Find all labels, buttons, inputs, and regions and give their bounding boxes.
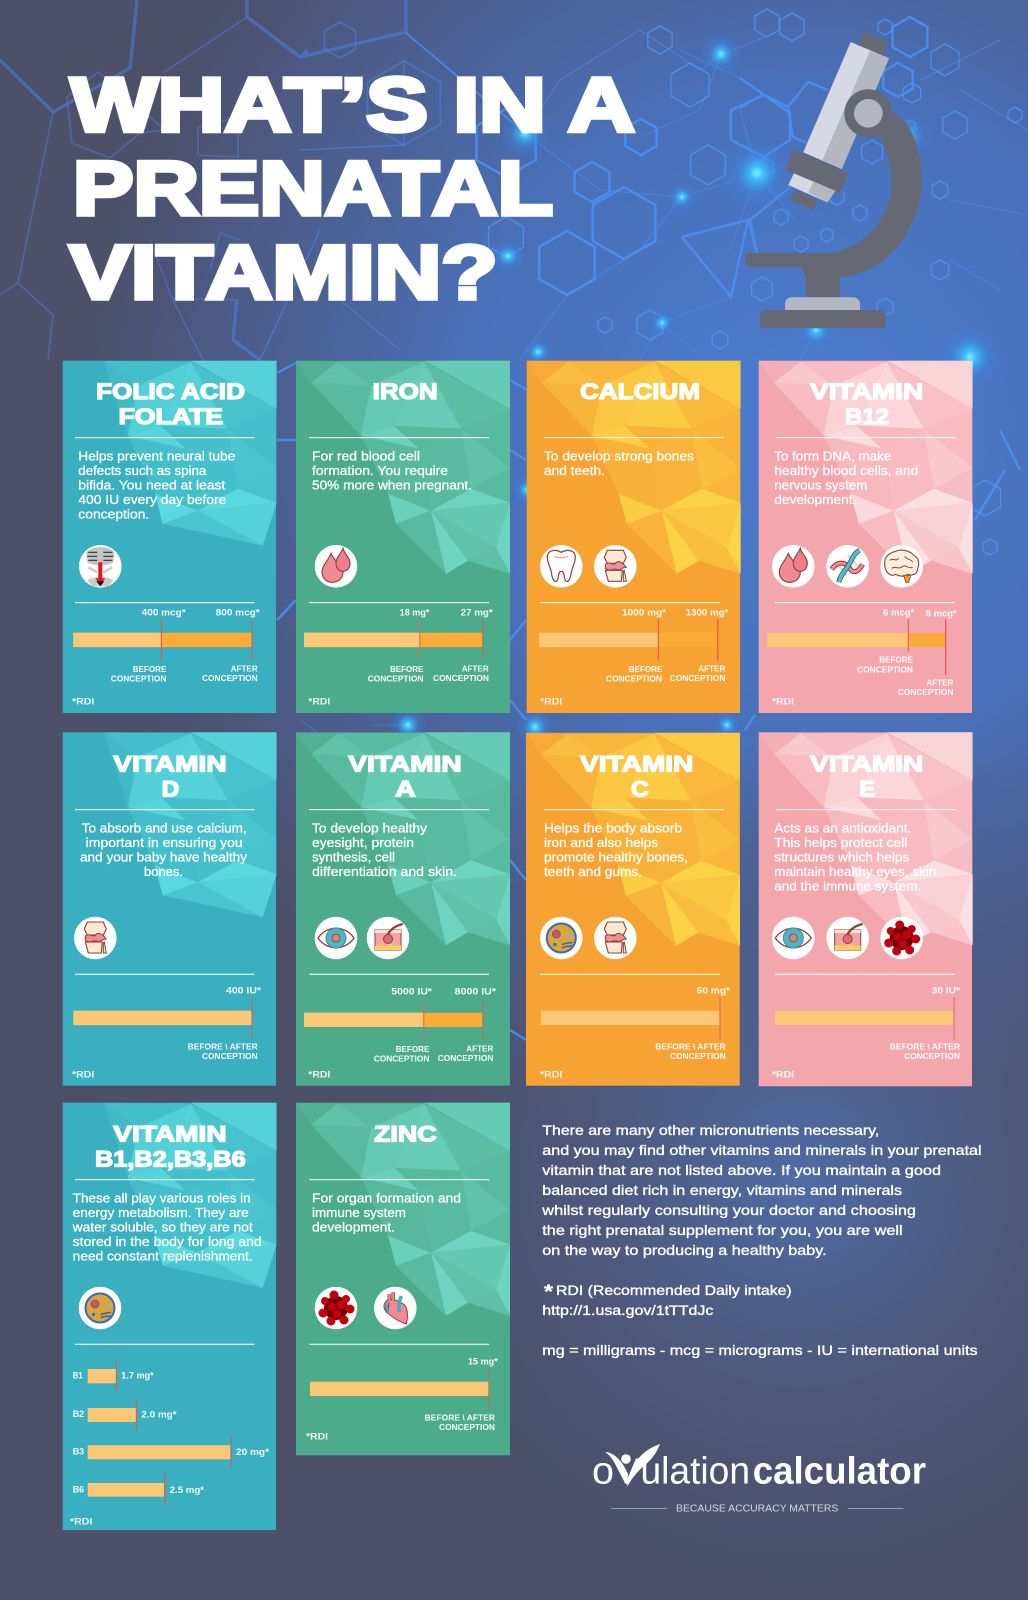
- panel: vitamin d: [63, 732, 277, 1086]
- bar chart: iron: BEFORE: [390, 664, 424, 674]
- bar chart: folic acid: 400 mcg*: [142, 607, 186, 617]
- text: b vitamins description: [72, 1192, 262, 1263]
- text: folic acid description: conception.: [78, 507, 149, 521]
- text: folic acid description: 400 IU every day before: [78, 493, 226, 507]
- bar chart: vitamin b12: AFTER: [926, 677, 953, 687]
- text block: units legend: mg = milligrams - mcg = micrograms - IU = international units: [542, 1343, 978, 1358]
- text: vitamin c description: iron and also helps: [544, 836, 658, 850]
- footnote: *RDI: [540, 697, 562, 708]
- bar chart: b vitamins: 2.5 mg*: [170, 1485, 205, 1495]
- text: vitamin a description: [312, 822, 457, 879]
- bar chart: zinc: CONCEPTION: [439, 1422, 495, 1432]
- text block: closing note: vitamin that are not listed above. If you maintain a good: [542, 1163, 941, 1178]
- heading: vitamin b group: VITAMIN: [113, 1121, 227, 1146]
- text: vitamin c description: [544, 822, 688, 879]
- text: vitamin d description: and your baby have healthy: [80, 850, 248, 864]
- footnote: *RDI: [306, 1431, 328, 1442]
- bar chart: b vitamins: [73, 1360, 270, 1506]
- text block: closing note: on the way to producing a healthy baby.: [542, 1243, 827, 1258]
- icon: blood drops: [315, 545, 357, 588]
- bar chart: calcium: CONCEPTION: [606, 674, 662, 684]
- bar chart: calcium: CONCEPTION: [670, 673, 725, 683]
- icon: cell: [79, 1287, 121, 1329]
- icons: tooth and knee: [540, 545, 637, 588]
- icons: cell and knee: [540, 917, 637, 959]
- text: vitamin a description: To develop healthy: [312, 822, 428, 836]
- text: vitamin a description: differentiation and skin.: [312, 865, 457, 879]
- panel: calcium: [527, 361, 741, 713]
- text block: rdi source: RDI (Recommended Daily intake): [556, 1283, 792, 1298]
- text block: closing note: There are many other micronutrients necessary,: [542, 1123, 879, 1138]
- footnote: *RDI: [72, 1070, 94, 1081]
- text: vitamin c description: promote healthy bones,: [544, 850, 688, 864]
- panel: vitamin b1 b2 b3 b6: [63, 1103, 277, 1530]
- text: iron description: formation. You require: [312, 464, 448, 478]
- bar chart: iron: AFTER: [462, 663, 489, 673]
- bar chart: b vitamins: 20 mg*: [236, 1447, 270, 1457]
- text: vitamin c description: teeth and gums.: [544, 865, 642, 879]
- bar chart: iron: 27 mg*: [461, 607, 493, 617]
- text: folic acid description: defects such as spina: [78, 464, 206, 478]
- text block: rdi source: *: [544, 1282, 554, 1303]
- bar chart: folic acid: 800 mcg*: [216, 607, 260, 617]
- text: iron description: [312, 450, 472, 492]
- text: zinc description: [312, 1192, 461, 1234]
- bar chart: vitamin e: BEFORE \ AFTER: [890, 1041, 960, 1051]
- bar chart: vitamin a: CONCEPTION: [374, 1054, 429, 1064]
- title: WHAT’S IN A: [71, 63, 635, 148]
- logo: ovulation calculator: ulation: [640, 1450, 750, 1492]
- text: vitamin e description: This helps protect cell: [774, 836, 907, 850]
- text: b vitamins description: stored in the body for long and: [73, 1235, 262, 1249]
- text block: rdi source: [542, 1282, 792, 1318]
- text: zinc description: For organ formation and: [312, 1192, 461, 1206]
- heading: vitamin e: VITAMIN: [810, 751, 923, 776]
- bar chart: b vitamins: B6: [73, 1484, 84, 1494]
- text: vitamin d description: [80, 822, 248, 879]
- text: iron description: For red blood cell: [312, 450, 420, 464]
- heading: folic acid folate: FOLATE: [118, 404, 223, 429]
- text: vitamin b12 description: To form DNA, make: [774, 450, 891, 464]
- text: calcium description: [544, 450, 694, 478]
- text: vitamin b12 description: [774, 450, 918, 507]
- bar chart: vitamin a: CONCEPTION: [438, 1053, 493, 1063]
- bar chart: vitamin b12: 8 mcg*: [926, 608, 957, 618]
- heading: vitamin d: VITAMIN: [113, 751, 227, 776]
- heading: vitamin a: A: [395, 776, 416, 801]
- icons: eye and skin: [315, 917, 409, 959]
- bar chart: calcium: [539, 607, 729, 684]
- text: b vitamins description: These all play various roles in: [73, 1192, 251, 1206]
- icon: spine: [79, 545, 122, 588]
- bar chart: vitamin b12: BEFORE: [879, 655, 913, 665]
- text: vitamin e description: [774, 822, 936, 893]
- title: [70, 63, 635, 315]
- text: vitamin c description: Helps the body absorb: [544, 822, 682, 836]
- bar chart: calcium: 1000 mg*: [622, 607, 667, 617]
- bar chart: vitamin a: 8000 IU*: [455, 986, 497, 996]
- heading: vitamin b12: VITAMIN: [810, 379, 923, 404]
- heading: vitamin c: [580, 751, 693, 801]
- bar chart: folic acid: CONCEPTION: [111, 674, 166, 684]
- text: calcium description: To develop strong bones: [544, 450, 694, 464]
- bar chart: folic acid: AFTER: [231, 663, 258, 673]
- heading: folic acid folate: [96, 379, 245, 429]
- bar chart: vitamin b12: CONCEPTION: [857, 664, 913, 674]
- bar chart: vitamin e: [775, 985, 961, 1061]
- text: folic acid description: [78, 450, 235, 521]
- bar chart: calcium: AFTER: [698, 663, 725, 673]
- bar chart: calcium: 1300 mg*: [686, 607, 729, 617]
- footnote: *RDI: [772, 697, 794, 708]
- footnote: *RDI: [772, 1070, 794, 1081]
- heading: vitamin d: [113, 751, 227, 801]
- bar chart: b vitamins: 2.0 mg*: [141, 1410, 177, 1420]
- text: vitamin e description: maintain healthy eyes, skin: [774, 865, 936, 879]
- text block: closing note: balanced diet rich in energy, vitamins and minerals: [542, 1183, 902, 1198]
- bar chart: zinc: 15 mg*: [468, 1356, 498, 1366]
- heading: folic acid folate: FOLIC ACID: [96, 379, 245, 404]
- footnote: *RDI: [70, 1516, 92, 1527]
- icons: blood, dna, brain: [772, 545, 923, 588]
- bar chart: vitamin c: CONCEPTION: [670, 1051, 726, 1061]
- text: vitamin b12 description: nervous system: [774, 478, 867, 492]
- heading: vitamin a: VITAMIN: [348, 751, 462, 776]
- bar chart: folic acid: CONCEPTION: [202, 673, 258, 683]
- panel: zinc: [296, 1103, 510, 1455]
- text: b vitamins description: need constant replenishment.: [73, 1249, 253, 1263]
- logo: ovulation calculator: [592, 1444, 926, 1515]
- bar chart: vitamin d: 400 IU*: [226, 985, 262, 995]
- text: vitamin e description: and the immune system.: [774, 879, 921, 893]
- text: folic acid description: bifida. You need at least: [78, 478, 226, 492]
- bar chart: iron: 18 mg*: [400, 607, 430, 617]
- heading: vitamin b group: B1,B2,B3,B6: [95, 1146, 246, 1171]
- text: vitamin d description: To absorb and use calcium,: [82, 822, 247, 836]
- panel: vitamin c: [526, 733, 740, 1086]
- text: vitamin e description: structures which helps: [774, 850, 909, 864]
- bar chart: vitamin a: AFTER: [466, 1043, 493, 1053]
- bar chart: vitamin b12: [767, 607, 957, 697]
- bar chart: folic acid: [73, 607, 260, 684]
- heading: vitamin b12: B12: [845, 404, 889, 429]
- title: PRENATAL: [73, 146, 553, 231]
- title: VITAMIN?: [70, 230, 498, 315]
- bar chart: vitamin e: 30 IU*: [932, 985, 961, 995]
- bar chart: vitamin b12: CONCEPTION: [898, 687, 953, 697]
- text: vitamin b12 description: development.: [774, 493, 856, 507]
- bar chart: vitamin a: 5000 IU*: [391, 986, 433, 996]
- bar chart: vitamin c: [541, 985, 731, 1061]
- logo: ovulation calculator: calculator: [753, 1450, 926, 1492]
- bar chart: vitamin d: CONCEPTION: [202, 1051, 258, 1061]
- bar chart: vitamin a: [304, 986, 497, 1064]
- bar chart: iron: [304, 607, 493, 684]
- footnote: *RDI: [72, 697, 94, 708]
- text: folic acid description: Helps prevent neural tube: [78, 450, 235, 464]
- molecular network pattern: [0, 0, 1028, 1040]
- bar chart: zinc: BEFORE \ AFTER: [425, 1412, 495, 1422]
- bar chart: vitamin c: 60 mg*: [697, 985, 731, 995]
- text block: closing note: the right prenatal supplement for you, you are well: [542, 1223, 903, 1238]
- text block: rdi source: http://1.usa.gov/1tTTdJc: [542, 1303, 714, 1318]
- footnote: *RDI: [308, 1070, 330, 1081]
- bar chart: b vitamins: 1.7 mg*: [121, 1371, 154, 1381]
- heading: calcium: CALCIUM: [580, 379, 700, 404]
- heading: vitamin c: C: [631, 776, 649, 801]
- text block: closing note: whilst regularly consulting your doctor and choosing: [541, 1203, 916, 1218]
- heading: vitamin c: VITAMIN: [580, 751, 693, 776]
- text: vitamin a description: synthesis, cell: [312, 850, 395, 864]
- logo: ovulation calculator: o: [592, 1450, 614, 1492]
- panel: vitamin e: [759, 732, 973, 1086]
- panel: vitamin b12: [759, 361, 973, 713]
- text: calcium description: and teeth.: [544, 464, 605, 478]
- bar chart: b vitamins: B1: [73, 1370, 83, 1380]
- text: zinc description: immune system: [312, 1206, 406, 1220]
- icon: microscope: [745, 32, 922, 328]
- heading: iron: IRON: [373, 379, 438, 404]
- text: iron description: 50% more when pregnant.: [312, 478, 472, 492]
- text: vitamin b12 description: healthy blood cells, and: [774, 464, 918, 478]
- tagline: BECAUSE ACCURACY MATTERS: [676, 1503, 838, 1515]
- footnote: *RDI: [540, 1070, 562, 1081]
- logo: ovulation calculator: V: [614, 1450, 640, 1492]
- text: vitamin d description: bones.: [144, 865, 183, 879]
- icon: knee: [74, 917, 117, 959]
- heading: vitamin b12: [810, 379, 923, 429]
- icons: red cells and heart: [315, 1287, 417, 1329]
- bar chart: vitamin e: CONCEPTION: [904, 1051, 960, 1061]
- text: b vitamins description: water soluble, so they are not: [72, 1220, 253, 1234]
- bar chart: b vitamins: B3: [73, 1447, 84, 1457]
- heading: zinc: ZINC: [374, 1121, 437, 1146]
- panel: vitamin a: [296, 732, 510, 1086]
- text block: closing note: [541, 1123, 982, 1258]
- bar chart: zinc: [310, 1356, 498, 1432]
- text: b vitamins description: energy metabolism. They are: [73, 1206, 249, 1220]
- panel: iron: [296, 361, 510, 713]
- text: vitamin a description: eyesight, protein: [312, 836, 414, 850]
- footnote: *RDI: [308, 697, 330, 708]
- text: zinc description: development.: [312, 1220, 395, 1234]
- bar chart: vitamin b12: 6 mcg*: [883, 607, 915, 617]
- bar chart: b vitamins: B2: [73, 1409, 84, 1419]
- heading: vitamin a: [348, 751, 462, 801]
- bar chart: vitamin c: BEFORE \ AFTER: [655, 1041, 726, 1051]
- text block: closing note: and you may find other vitamins and minerals in your prenatal: [542, 1143, 982, 1158]
- heading: vitamin b group: [95, 1121, 246, 1171]
- heading: vitamin d: D: [162, 776, 179, 801]
- bar chart: vitamin d: BEFORE \ AFTER: [188, 1041, 258, 1051]
- bar chart: calcium: BEFORE: [629, 664, 663, 674]
- bar chart: iron: CONCEPTION: [433, 673, 489, 683]
- text: vitamin e description: Acts as an antioxidant.: [774, 822, 911, 836]
- bar chart: vitamin a: BEFORE: [396, 1044, 430, 1054]
- heading: vitamin e: [810, 751, 923, 801]
- panel: folic acid folate: [63, 361, 277, 713]
- bar chart: iron: CONCEPTION: [368, 674, 423, 684]
- bar chart: vitamin d: [73, 985, 262, 1061]
- text: vitamin d description: important in ensuring you: [86, 836, 243, 850]
- heading: vitamin e: E: [859, 776, 875, 801]
- bar chart: folic acid: BEFORE: [133, 664, 167, 674]
- icons: eye, skin, red cells: [772, 917, 923, 959]
